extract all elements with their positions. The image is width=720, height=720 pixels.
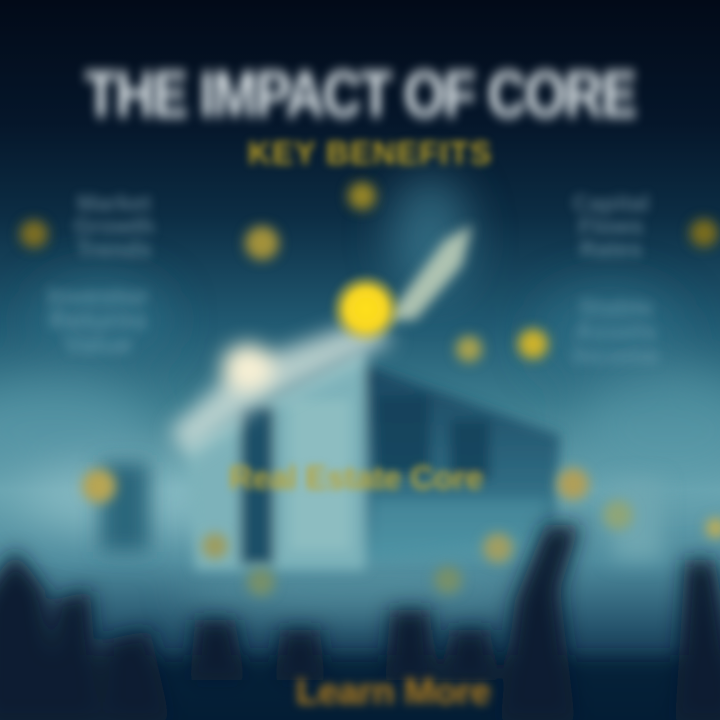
gold coins [20,182,720,596]
text block: lower left: Investor [47,281,149,311]
central coin [330,273,402,345]
foreground crowd silhouettes [0,525,720,720]
text block: upper left: Growth [74,213,154,239]
text block: lower left [45,281,149,359]
text block: upper right: Rates [580,236,642,262]
title: THE IMPACT OF CORE [84,59,636,131]
text block: upper right: Flows [578,213,644,239]
text block: upper left [71,190,156,262]
text block: lower left: Returns [49,305,147,335]
text block: lower right [572,294,660,370]
text block: upper right [570,190,652,262]
text block: upper left: Market [77,190,151,216]
light beam [385,225,472,320]
text block: lower left: Value [64,329,132,359]
text block: lower right: Assets [575,318,657,346]
text block: lower right: Income [572,342,660,370]
footer text: Learn More [296,671,490,712]
skyline [100,462,662,560]
text block: upper right: Capital [573,190,649,216]
central building [185,350,560,570]
rising arrow light [170,320,395,455]
text block: upper left: Trends [76,236,152,262]
text block: lower right: Stable [578,294,654,322]
building banner text: Real Estate Core [229,459,483,496]
background glow [0,175,720,615]
subtitle: KEY BENEFITS [248,135,492,171]
